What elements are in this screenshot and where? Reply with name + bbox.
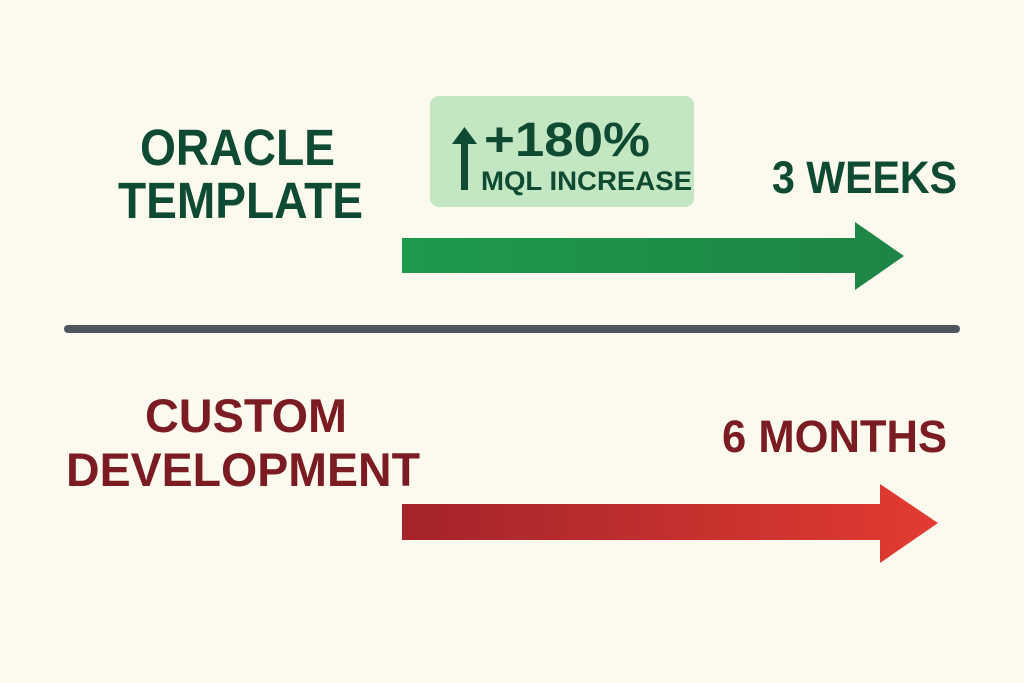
heading: oracle template: TEMPLATE <box>118 172 363 229</box>
callout: mql increase: MQL INCREASE <box>481 166 692 196</box>
heading: oracle template <box>118 119 363 229</box>
icon: up arrow <box>452 127 477 190</box>
arrow: green <box>402 222 904 290</box>
callout: mql increase <box>430 96 694 207</box>
label: 6 months: 6 MONTHS <box>722 411 947 462</box>
divider <box>68 325 956 333</box>
callout: mql increase: +180% <box>484 114 650 167</box>
heading: custom development: DEVELOPMENT <box>66 443 420 496</box>
heading: oracle template: ORACLE <box>140 119 335 176</box>
label: 3 weeks: 3 WEEKS <box>772 152 957 203</box>
arrow: red <box>402 484 938 563</box>
heading: custom development: CUSTOM <box>145 389 347 442</box>
heading: custom development <box>66 389 420 496</box>
